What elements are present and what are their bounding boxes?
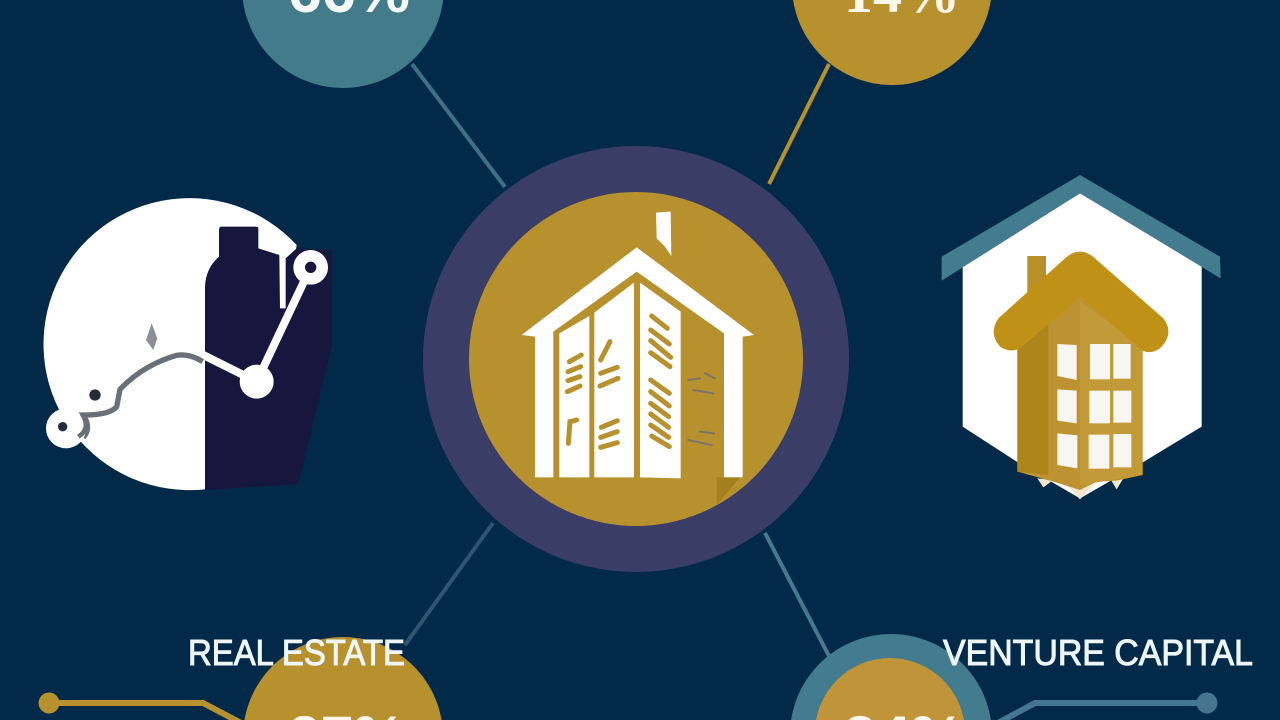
house — [994, 252, 1168, 499]
label: real estate: REAL ESTATE — [188, 632, 405, 673]
percentage circle: bottom-right — [790, 634, 992, 720]
icon: central building — [522, 212, 754, 505]
pointer line: venture capital — [996, 692, 1218, 720]
percentage circle: top-left — [242, 0, 444, 88]
dark bottle panel — [205, 227, 332, 490]
trend line — [46, 250, 328, 448]
icon: house badge — [942, 175, 1221, 499]
label: venture capital: VENTURE CAPITAL — [943, 632, 1253, 673]
percentage circle: top-right — [792, 0, 992, 85]
percentage circle: bottom-left — [243, 637, 443, 720]
pointer line: real estate — [38, 692, 243, 720]
connector: top-right — [769, 64, 829, 184]
connector: bottom-left — [405, 523, 493, 645]
connector: top-left — [412, 64, 505, 187]
windows — [1057, 344, 1131, 469]
hexagon roof — [942, 175, 1221, 281]
central emblem — [423, 146, 849, 572]
icon: growth chart badge — [44, 198, 332, 490]
connector: bottom-right — [765, 533, 829, 656]
